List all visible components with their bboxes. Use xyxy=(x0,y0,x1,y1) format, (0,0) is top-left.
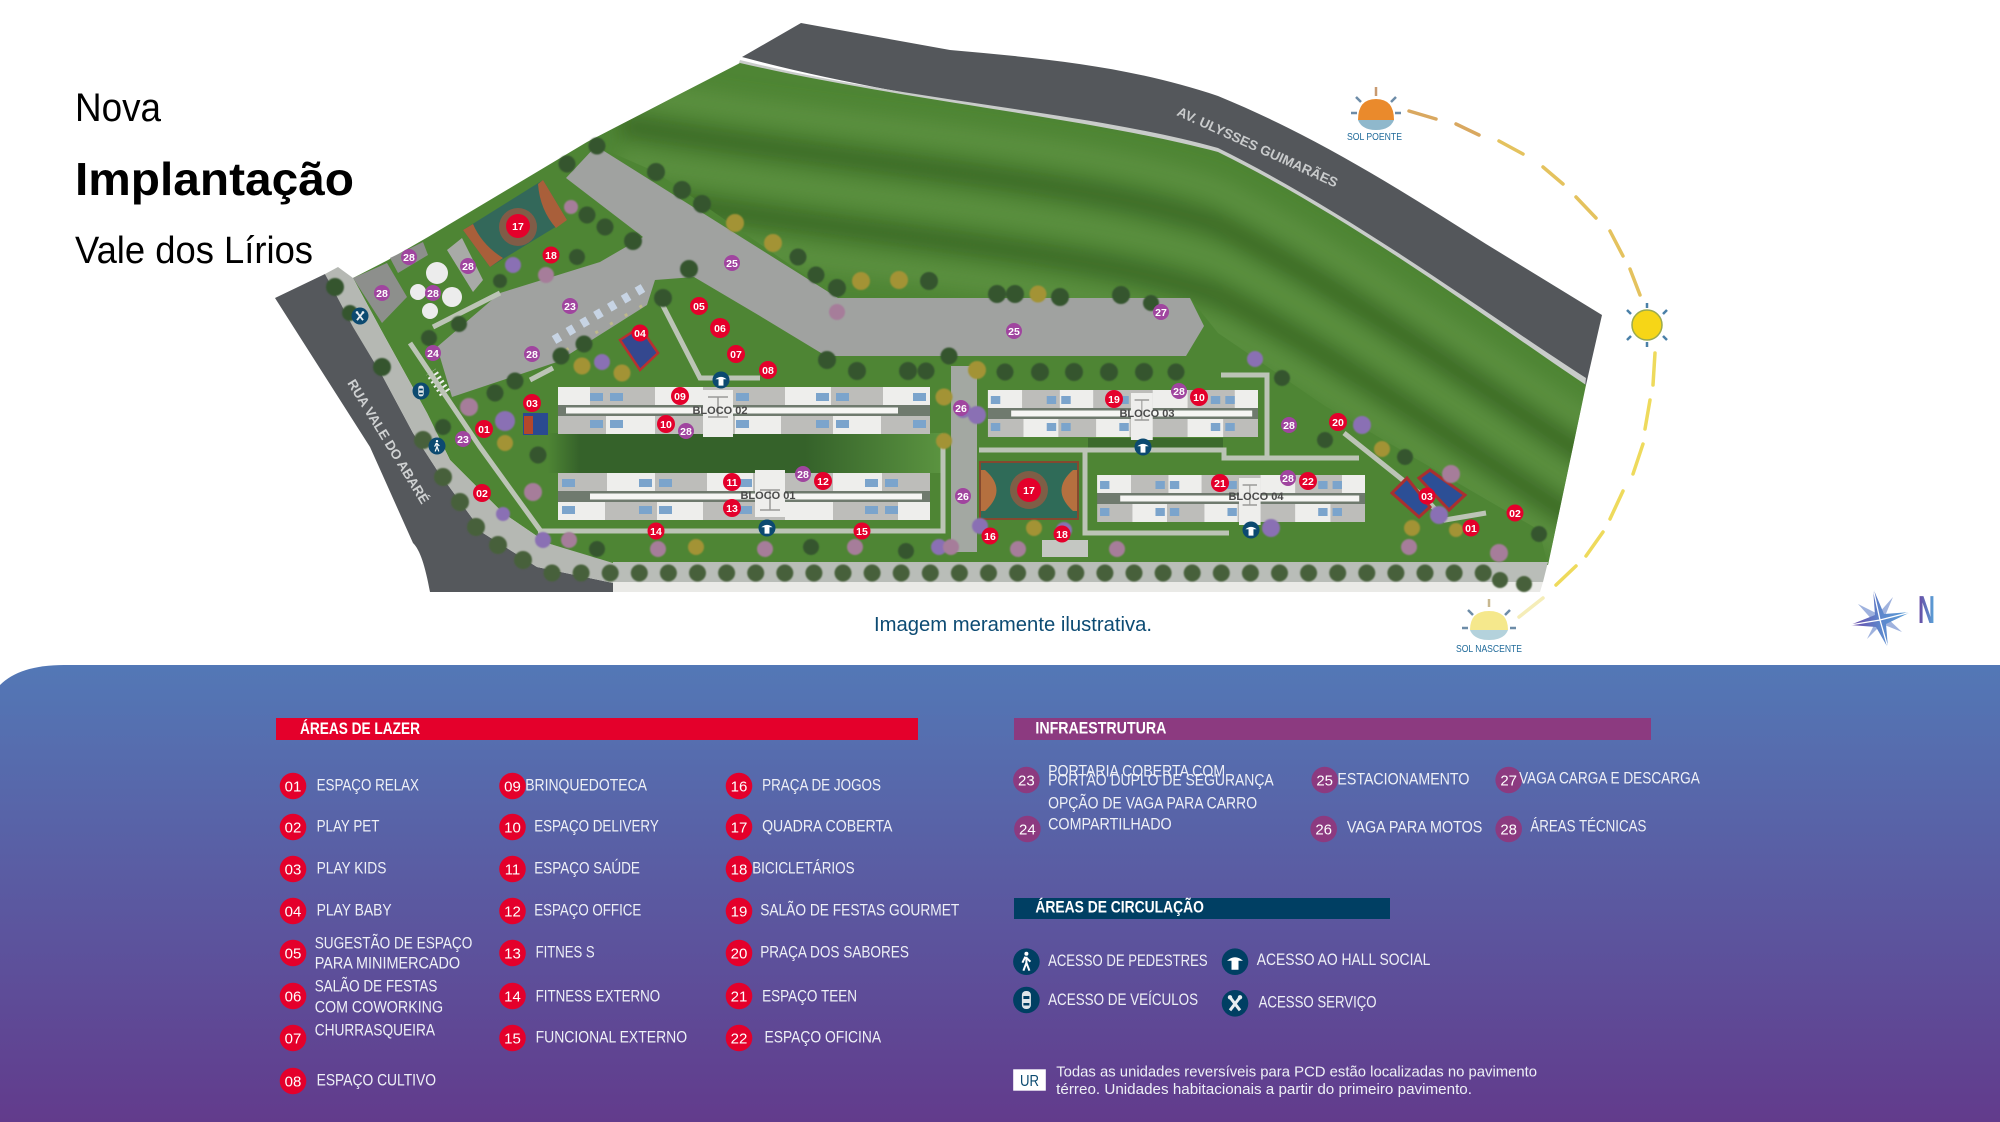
item 09: 09 xyxy=(504,778,521,795)
footnote: UR: Todas as unidades reversíveis para PCD estão localizadas no pavimento xyxy=(1056,1064,1537,1081)
map markers: infrastructure: 28 xyxy=(376,288,388,300)
title: Implantação xyxy=(75,153,354,205)
map markers: leisure areas: 15 xyxy=(856,526,868,538)
bottom sidewalk strip xyxy=(613,562,1548,592)
item 13: FITNES S xyxy=(536,943,595,961)
map markers: infrastructure: 28 xyxy=(797,469,809,481)
item 27: VAGA CARGA E DESCARGA xyxy=(1519,769,1700,787)
item 19: SALÃO DE FESTAS GOURMET xyxy=(760,899,959,919)
background panel: legend xyxy=(0,665,2000,1122)
map markers: infrastructure: 27 xyxy=(1155,307,1167,319)
icon: sol a pino xyxy=(1627,303,1667,347)
item 06: 06 xyxy=(285,988,301,1005)
map markers: leisure areas: 20 xyxy=(1332,417,1344,429)
icon: sol poente xyxy=(1347,87,1402,143)
icon: sol poente: SOL POENTE xyxy=(1347,132,1402,143)
title: Vale dos Lírios xyxy=(75,230,313,272)
item 24: COMPARTILHADO xyxy=(1048,815,1172,833)
item 22 xyxy=(726,1025,881,1051)
item 12: ESPAÇO OFFICE xyxy=(534,901,641,919)
item 01: 01 xyxy=(285,778,301,795)
heading: infraestrutura: INFRAESTRUTURA xyxy=(1035,719,1167,737)
item 06: COM COWORKING xyxy=(315,998,443,1016)
item 19: 19 xyxy=(731,903,747,920)
parking and internal roads xyxy=(437,146,1204,397)
item 28: 28 xyxy=(1500,821,1517,838)
item 11: 11 xyxy=(505,861,520,878)
item 21: 21 xyxy=(731,988,747,1005)
item 15 xyxy=(499,1025,687,1051)
item: acesso de pedestres xyxy=(1013,948,1208,975)
map markers: infrastructure: 25 xyxy=(726,258,738,270)
item 02 xyxy=(280,814,379,840)
map markers: leisure areas: 11 xyxy=(726,477,738,489)
item 15: 15 xyxy=(504,1030,521,1047)
item 27 xyxy=(1495,767,1700,793)
title: Nova xyxy=(75,86,162,130)
item 18: 18 xyxy=(731,861,747,878)
item 08: 08 xyxy=(285,1073,301,1090)
item 02: 02 xyxy=(285,819,301,836)
heading: áreas de circulação xyxy=(1014,897,1390,919)
item: acesso de veículos: ACESSO DE VEÍCULOS xyxy=(1048,990,1198,1009)
map markers: infrastructure: 28 xyxy=(462,261,474,273)
item 07 xyxy=(280,1021,435,1051)
item 17: QUADRA COBERTA xyxy=(762,818,893,836)
item 22: ESPAÇO OFICINA xyxy=(764,1028,881,1046)
map markers: infrastructure: 25 xyxy=(1008,326,1020,338)
item 05: 05 xyxy=(285,945,301,962)
map markers: leisure areas: 06 xyxy=(714,323,726,335)
map markers: leisure areas: 12 xyxy=(817,476,829,488)
item 22: 22 xyxy=(731,1030,747,1047)
item 25: 25 xyxy=(1316,772,1333,789)
item: acesso ao hall social: ACESSO AO HALL SOCIAL xyxy=(1257,951,1430,969)
map markers: leisure areas: 18 xyxy=(1056,529,1068,541)
map markers: leisure areas: 14 xyxy=(650,526,662,538)
technical buildings and water tanks xyxy=(353,238,483,323)
map markers: circulation access xyxy=(352,308,1260,538)
item 28: ÁREAS TÉCNICAS xyxy=(1530,816,1647,835)
item 19 xyxy=(726,898,959,924)
item 26: 26 xyxy=(1315,821,1332,838)
icon: sol nascente: SOL NASCENTE xyxy=(1456,644,1522,655)
item 02: PLAY PET xyxy=(317,818,379,836)
item 11: ESPAÇO SAÚDE xyxy=(534,858,640,877)
item 09: BRINQUEDOTECA xyxy=(525,777,647,795)
item 03: PLAY KIDS xyxy=(317,859,387,877)
panel: áreas de lazer xyxy=(276,718,959,1094)
item 07: CHURRASQUEIRA xyxy=(315,1021,435,1039)
map markers: leisure areas: 16 xyxy=(984,531,996,543)
item 05: SUGESTÃO DE ESPAÇO xyxy=(315,932,472,952)
item 04: 04 xyxy=(285,903,301,920)
item 18: BICICLETÁRIOS xyxy=(752,858,855,877)
building blocks: BLOCO 01 xyxy=(740,490,796,502)
item: acesso serviço: ACESSO SERVIÇO xyxy=(1259,993,1377,1011)
item 24: OPÇÃO DE VAGA PARA CARRO xyxy=(1048,792,1257,812)
map markers: leisure areas: 01 xyxy=(478,424,490,436)
map markers: leisure areas: 03 xyxy=(526,398,538,410)
map markers: infrastructure: 26 xyxy=(955,403,967,415)
icon: compass rose xyxy=(1850,588,1935,648)
item 08 xyxy=(280,1068,436,1094)
map markers: leisure areas: 22 xyxy=(1302,476,1314,488)
map markers: infrastructure: 28 xyxy=(1283,420,1295,432)
sports courts xyxy=(463,180,1078,519)
item: acesso serviço xyxy=(1222,990,1377,1017)
map markers: leisure areas: 05 xyxy=(693,301,705,313)
item 16 xyxy=(726,773,881,799)
map markers: infrastructure: 28 xyxy=(526,349,538,361)
heading: infraestrutura xyxy=(1014,718,1651,740)
heading: áreas de circulação: ÁREAS DE CIRCULAÇÃO xyxy=(1035,897,1204,917)
caption: Imagem meramente ilustrativa. xyxy=(874,614,1152,636)
item 03 xyxy=(280,856,387,882)
item 24: 24 xyxy=(1019,821,1036,838)
heading: áreas de lazer: ÁREAS DE LAZER xyxy=(300,719,420,738)
lawn and site ground xyxy=(353,63,1600,570)
item 21: ESPAÇO TEEN xyxy=(762,987,857,1005)
map markers: leisure areas: 10 xyxy=(660,419,672,431)
map markers: leisure areas: 01 xyxy=(1465,523,1477,535)
item 23: PORTÃO DUPLO DE SEGURANÇA xyxy=(1048,769,1274,789)
building blocks: BLOCO 04 xyxy=(1228,491,1284,503)
map markers: leisure areas: 09 xyxy=(674,391,686,403)
building blocks: BLOCO 03 xyxy=(1119,408,1175,420)
map markers: infrastructure: 24 xyxy=(427,348,439,360)
row of street trees xyxy=(414,431,1532,592)
item 13: 13 xyxy=(504,945,521,962)
map markers: leisure areas: 02 xyxy=(1509,508,1521,520)
icon: sol nascente xyxy=(1456,599,1522,655)
item 26: VAGA PARA MOTOS xyxy=(1347,818,1482,836)
item 12: 12 xyxy=(504,903,521,920)
map markers: leisure areas: 04 xyxy=(634,328,646,340)
item 17 xyxy=(726,814,893,840)
map markers: leisure areas xyxy=(473,214,1524,544)
trees xyxy=(326,138,1547,562)
map markers: infrastructure: 28 xyxy=(1173,386,1185,398)
map markers: infrastructure: 28 xyxy=(403,252,415,264)
item: acesso de veículos xyxy=(1013,987,1198,1013)
footnote: UR: térreo. Unidades habitacionais a partir do primeiro pavimento. xyxy=(1056,1081,1472,1098)
map markers: leisure areas: 02 xyxy=(476,488,488,500)
sun path arrows xyxy=(1409,111,1655,617)
title xyxy=(75,86,354,272)
item 07: 07 xyxy=(285,1030,301,1047)
map markers: leisure areas: 19 xyxy=(1108,394,1120,406)
map markers: infrastructure xyxy=(374,249,1297,504)
item 21 xyxy=(726,983,857,1009)
item 11 xyxy=(499,856,640,882)
item 01 xyxy=(280,773,419,799)
item 10: ESPAÇO DELIVERY xyxy=(534,818,659,836)
map markers: leisure areas: 07 xyxy=(730,349,742,361)
road: Av. Ulysses Guimarães: AV. ULYSSES GUIMARÃES xyxy=(1175,104,1340,190)
parking spaces xyxy=(431,288,652,393)
item: acesso de pedestres: ACESSO DE PEDESTRES xyxy=(1048,952,1208,970)
panel: infraestrutura xyxy=(1013,718,1700,842)
item 10: 10 xyxy=(504,819,521,836)
map markers: infrastructure: 28 xyxy=(680,426,692,438)
item 27: 27 xyxy=(1500,772,1517,789)
map markers: infrastructure: 23 xyxy=(457,434,469,446)
item 14: FITNESS EXTERNO xyxy=(536,987,660,1005)
compass letter N: N xyxy=(1918,589,1935,632)
map markers: leisure areas: 13 xyxy=(726,503,738,515)
item 20: 20 xyxy=(731,945,747,962)
map markers: infrastructure: 28 xyxy=(427,288,439,300)
map markers: leisure areas: 17 xyxy=(1023,485,1035,497)
item 09 xyxy=(499,773,647,799)
map markers: leisure areas: 21 xyxy=(1214,478,1226,490)
item 25: ESTACIONAMENTO xyxy=(1337,770,1469,788)
item 06: SALÃO DE FESTAS xyxy=(315,976,438,996)
footnote: UR: UR xyxy=(1020,1073,1039,1090)
item: acesso ao hall social xyxy=(1222,948,1430,975)
pedestrian paths and central walkway xyxy=(410,293,1486,557)
map markers: infrastructure: 28 xyxy=(1282,473,1294,485)
item 25 xyxy=(1311,767,1469,793)
item 18 xyxy=(726,856,855,882)
play areas xyxy=(523,327,1465,517)
building blocks: BLOCO 02 xyxy=(692,405,748,417)
item 13 xyxy=(499,940,595,966)
building blocks xyxy=(558,387,1365,525)
map markers: leisure areas: 03 xyxy=(1421,491,1433,503)
item 12 xyxy=(499,898,641,924)
map markers: infrastructure: 26 xyxy=(957,491,969,503)
map markers: leisure areas: 17 xyxy=(512,221,524,233)
item 06 xyxy=(280,976,443,1016)
item 14 xyxy=(499,983,660,1009)
item 03: 03 xyxy=(285,861,301,878)
item 16: 16 xyxy=(731,778,747,795)
item 14: 14 xyxy=(504,988,521,1005)
item 10 xyxy=(499,814,659,840)
panel: áreas de circulação xyxy=(1013,897,1430,1017)
map markers: leisure areas: 10 xyxy=(1193,392,1205,404)
item 20: PRAÇA DOS SABORES xyxy=(760,943,909,961)
item 05 xyxy=(280,932,472,972)
item 04: PLAY BABY xyxy=(317,901,392,919)
map markers: leisure areas: 18 xyxy=(545,250,557,262)
road: Av. Ulysses Guimarães xyxy=(738,23,1602,387)
road: Rua Vale do Abaré xyxy=(275,274,613,592)
item 23: PORTARIA COBERTA COM xyxy=(1048,763,1225,781)
heading: áreas de lazer xyxy=(276,718,918,740)
item 15: FUNCIONAL EXTERNO xyxy=(536,1028,687,1046)
footnote: UR xyxy=(1013,1064,1537,1098)
item 01: ESPAÇO RELAX xyxy=(317,777,419,795)
item 28 xyxy=(1495,816,1647,842)
item 16: PRAÇA DE JOGOS xyxy=(762,777,881,795)
item 04 xyxy=(280,898,392,924)
road: Rua Vale do Abaré: RUA VALE DO ABARÉ xyxy=(344,377,432,506)
item 24 xyxy=(1014,792,1257,842)
item 08: ESPAÇO CULTIVO xyxy=(317,1071,436,1089)
item 26 xyxy=(1310,816,1482,842)
sidewalk along Rua Vale do Abaré xyxy=(325,267,613,583)
item 17: 17 xyxy=(731,819,747,836)
item 23 xyxy=(1013,763,1274,793)
map markers: infrastructure: 23 xyxy=(564,301,576,313)
item 20 xyxy=(726,940,909,966)
map markers: leisure areas: 08 xyxy=(762,365,774,377)
item 23: 23 xyxy=(1018,772,1035,789)
item 05: PARA MINIMERCADO xyxy=(315,954,460,972)
site plan map xyxy=(275,23,1602,592)
